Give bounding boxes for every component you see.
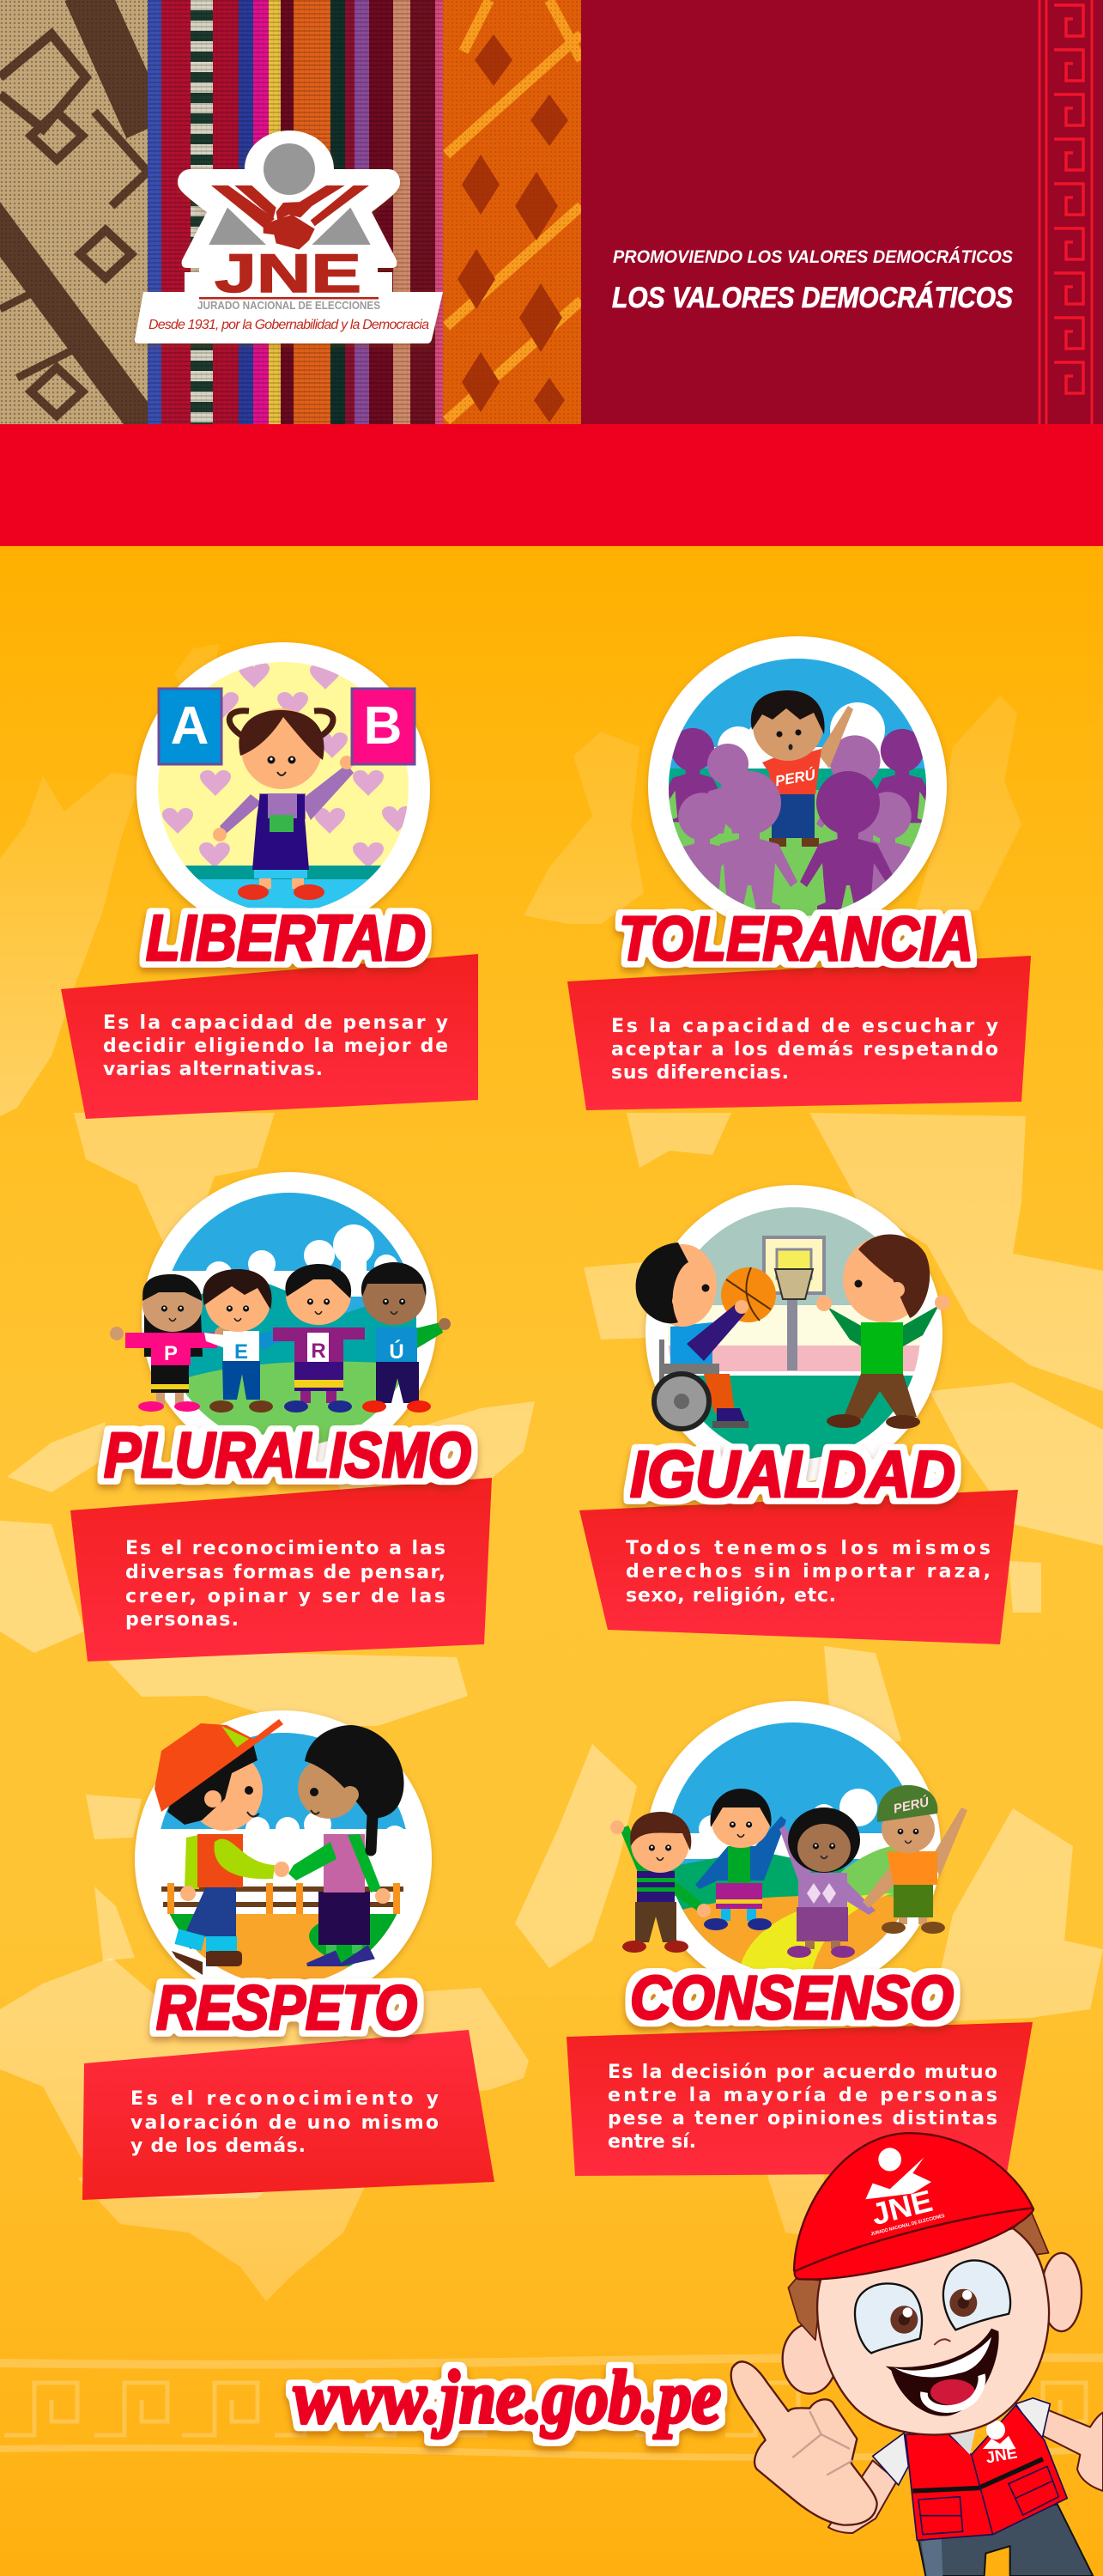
kid: R — [273, 1264, 365, 1413]
panel: maroon title block — [581, 0, 1103, 424]
kid: R: R — [311, 1340, 326, 1363]
letter block B — [352, 689, 415, 764]
cap — [794, 2133, 1033, 2280]
panel: respeto — [82, 1710, 494, 2200]
kid: U — [361, 1262, 451, 1413]
hand — [731, 2361, 877, 2525]
text card: pese a tener opiniones distintas — [608, 2108, 997, 2129]
kid: E: E — [234, 1340, 248, 1364]
right arm — [1043, 2409, 1103, 2491]
text card: decidir eligiendo la mejor de — [103, 1036, 448, 1057]
text card: Es el reconocimiento y — [130, 2088, 439, 2110]
panel: consenso — [567, 1701, 1033, 2176]
heading: LIBERTAD — [146, 902, 426, 974]
kid: U: Ú — [389, 1340, 404, 1364]
text card: Es la capacidad de pensar y — [103, 1012, 448, 1034]
text card: varias alternativas. — [103, 1059, 323, 1080]
kid: afro — [779, 1807, 876, 1958]
website url: www.jne.gob.pe — [294, 2356, 721, 2439]
text card: entre la mayoría de personas — [608, 2085, 997, 2106]
mouth — [886, 2329, 999, 2416]
text card — [567, 956, 1031, 1110]
heading: TOLERANCIA — [619, 905, 973, 974]
left forearm — [828, 2460, 897, 2533]
kid: striped shirt — [610, 1812, 711, 1953]
JNE logo: Desde 1931, por la Gobernabilidad y la Democracia — [148, 318, 429, 332]
text card — [82, 2030, 494, 2200]
text card: personas. — [125, 1609, 239, 1631]
illustration: handshake — [135, 1710, 432, 2008]
heading: CONSENSO — [630, 1965, 954, 2032]
standing boy — [816, 1235, 950, 1429]
cap logo — [865, 2148, 945, 2237]
panel: tolerancia — [567, 636, 1031, 1110]
kid: girl with jacket — [695, 1789, 786, 1930]
illustration: basketball — [636, 1185, 950, 1482]
wheelchair boy — [636, 1242, 748, 1429]
text card: valoración de uno mismo — [130, 2112, 439, 2134]
greek key border — [1039, 0, 1092, 424]
eyes — [855, 2260, 1010, 2353]
sleeves — [873, 2398, 1050, 2485]
main title: LOS VALORES DEMOCRÁTICOS — [612, 282, 1013, 314]
illustration: four children spelling peru — [110, 1172, 451, 1467]
text card: Es el reconocimiento a las — [125, 1538, 445, 1559]
letter block B: B — [364, 696, 402, 756]
letter block A — [159, 689, 221, 764]
vest — [906, 2405, 1067, 2540]
panel: pluralismo — [70, 1172, 492, 1662]
face — [817, 2228, 1049, 2435]
text card: y de los demás. — [130, 2136, 306, 2157]
vest logo: JNE — [985, 2443, 1019, 2467]
letter block A: A — [171, 696, 209, 756]
pants — [918, 2504, 1093, 2576]
illustration: four children — [610, 1701, 967, 1996]
text card — [70, 1478, 492, 1662]
text card — [579, 1490, 1018, 1644]
ears — [783, 2253, 1082, 2394]
cap logo: JURADO NACIONAL DE ELECCIONES — [870, 2214, 945, 2237]
heading: RESPETO — [156, 1974, 417, 2043]
cap label: PERÚ — [892, 1794, 931, 1816]
red band — [0, 424, 1103, 546]
JNE logo: JNE — [215, 244, 361, 304]
text card: aceptar a los demás respetando — [611, 1039, 998, 1060]
JNE logo — [135, 131, 443, 343]
basketball — [721, 1267, 776, 1322]
illustration: boy in crowd — [648, 636, 947, 935]
kid: green cap — [863, 1785, 967, 1934]
cap logo: JNE — [868, 2184, 936, 2232]
panel: igualdad — [579, 1185, 1018, 1644]
text card: Es la capacidad de escuchar y — [611, 1016, 998, 1037]
text card — [567, 2022, 1033, 2176]
subtitle: PROMOVIENDO LOS VALORES DEMOCRÁTICOS — [613, 247, 1013, 267]
mascot — [731, 2133, 1103, 2576]
hair — [788, 2212, 1049, 2340]
text card: diversas formas de pensar, — [125, 1562, 445, 1583]
text card — [61, 954, 478, 1119]
text card: entre sí. — [608, 2131, 696, 2153]
text card: Todos tenemos los mismos — [626, 1538, 991, 1559]
panel: yellow background — [0, 546, 1103, 2576]
kid: E — [203, 1269, 296, 1413]
text card: derechos sin importar raza, — [626, 1561, 991, 1583]
text card: Es la decisión por acuerdo mutuo — [608, 2062, 997, 2083]
kid: P: P — [164, 1342, 178, 1365]
boy — [155, 1719, 283, 1975]
text card: sexo, religión, etc. — [626, 1585, 836, 1607]
heading: PLURALISMO — [104, 1419, 471, 1491]
text card: sus diferencias. — [611, 1062, 789, 1084]
text card: creer, opinar y ser de las — [125, 1586, 445, 1607]
girl — [274, 1725, 404, 1965]
JNE logo: JURADO NACIONAL DE ELECCIONES — [197, 300, 380, 312]
heading: IGUALDAD — [630, 1438, 955, 1511]
shirt label: PERÚ — [773, 766, 817, 789]
panel: header textile — [0, 0, 581, 429]
illustration: girl with letter blocks — [136, 642, 430, 936]
panel: libertad — [61, 642, 478, 1119]
kid: P — [110, 1274, 228, 1412]
vest logo — [983, 2421, 1019, 2467]
